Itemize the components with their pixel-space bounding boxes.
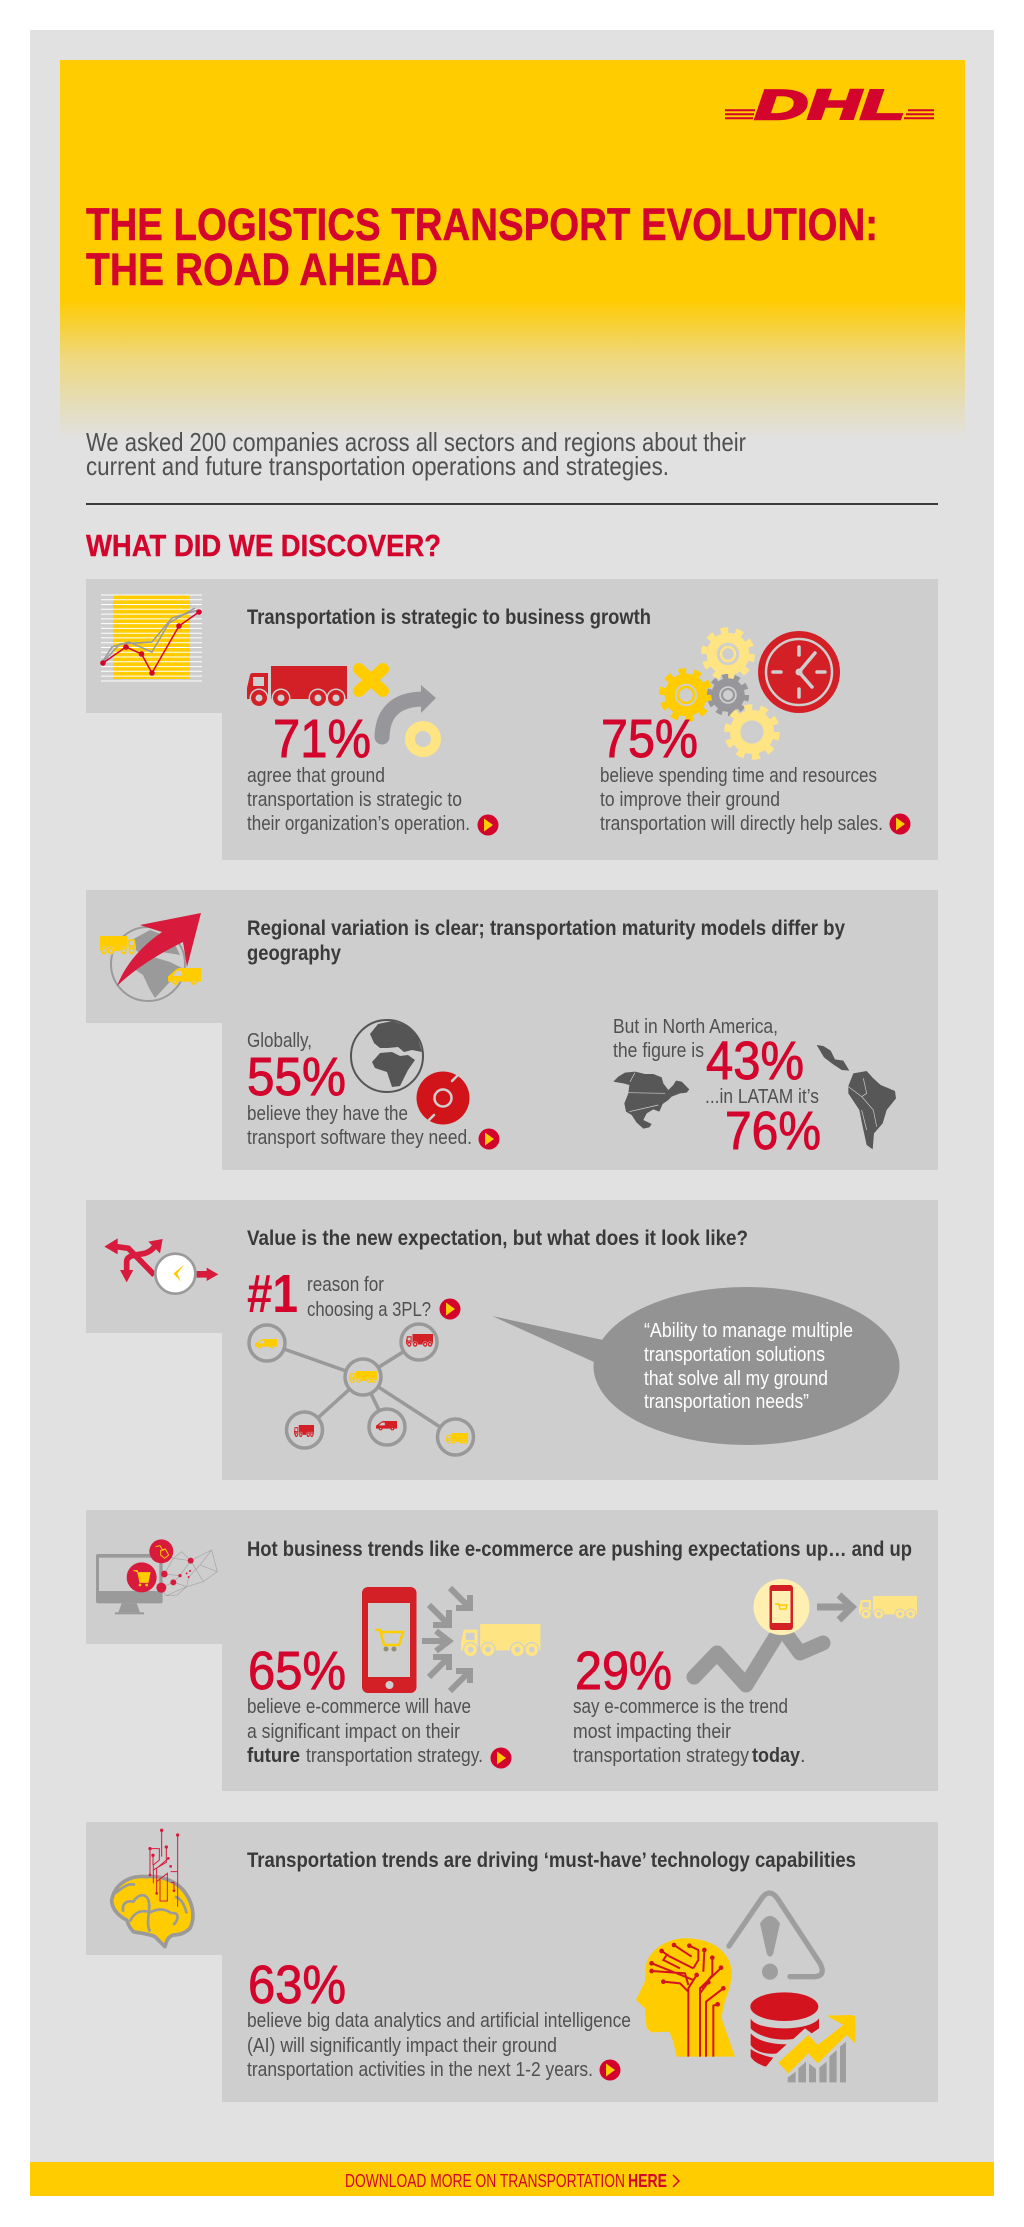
stat 55%: believe they have the	[247, 1103, 408, 1125]
icon: trend line with phone and truck	[694, 1579, 917, 1685]
title: THE LOGISTICS TRANSPORT EVOLUTION:	[86, 199, 878, 250]
stat 29%: most impacting their	[573, 1721, 731, 1743]
stat 55%: Globally,	[247, 1030, 312, 1052]
stat north america 43% and latam 76%: the figure is	[613, 1040, 704, 1062]
panel: technology capabilities	[86, 1822, 938, 2102]
icon: software disc	[416, 1072, 470, 1124]
callout: speech bubble: transportation needs”	[644, 1391, 809, 1413]
stat 71%: 71%	[273, 709, 371, 769]
stat north america 43% and latam 76%: ...in LATAM it’s	[705, 1086, 819, 1108]
stat 63%: (AI) will significantly impact their ground	[247, 2035, 557, 2057]
callout: speech bubble: that solve all my ground	[644, 1368, 828, 1390]
stat 63%: believe big data analytics and artificial intelligence	[247, 2010, 631, 2032]
icon: database	[750, 1992, 819, 2067]
heading: Value is the new expectation, but what does it look like?	[247, 1227, 748, 1250]
stat 29%: transportation strategy	[573, 1745, 749, 1767]
stat north america 43% and latam 76%: 43%	[706, 1031, 804, 1091]
stat 75%: to improve their ground	[600, 789, 780, 811]
stat 71%	[247, 709, 470, 835]
icon: play	[890, 814, 910, 834]
callout: speech bubble	[492, 1287, 900, 1445]
heading	[247, 917, 845, 965]
map: latin america	[817, 1045, 896, 1149]
map: north america	[600, 1062, 700, 1129]
stat 29%: 29%	[575, 1641, 672, 1701]
intro text: We asked 200 companies across all sectors and regions about their	[86, 427, 746, 457]
stat 71%: transportation is strategic to	[247, 789, 462, 811]
icon: gears and clock	[663, 631, 840, 756]
icon: ai head, warning, database, growth	[636, 1893, 855, 2082]
icon: brain with circuit	[112, 1829, 193, 1947]
heading: Regional variation is clear; transportation maturity models differ by	[247, 917, 845, 940]
icon: arrows and clock	[104, 1238, 218, 1294]
stat 63%: 63%	[248, 1955, 346, 2015]
stat 71%: agree that ground	[247, 765, 385, 787]
stat 29%: say e-commerce is the trend	[573, 1696, 788, 1718]
icon: head with circuit	[636, 1938, 735, 2057]
stat #1	[247, 1264, 431, 1324]
stat north america 43% and latam 76%: But in North America,	[613, 1016, 778, 1038]
stat 29%: today	[752, 1745, 801, 1767]
panel: regional variation	[86, 890, 938, 1170]
DHL logo: DHL	[755, 81, 905, 128]
title: THE ROAD AHEAD	[86, 244, 438, 295]
callout: speech bubble: “Ability to manage multiple	[644, 1320, 853, 1342]
icon: play	[490, 1748, 512, 1768]
stat 75%: believe spending time and resources	[600, 765, 877, 787]
stat #1: #1	[247, 1264, 298, 1324]
stat north america 43% and latam 76%	[613, 1016, 821, 1161]
stat 65%: 65%	[248, 1641, 346, 1701]
icon: warning triangle	[729, 1893, 822, 1980]
panel: e-commerce trends	[86, 1510, 938, 1791]
stat 55%	[247, 1030, 472, 1149]
heading: geography	[247, 942, 341, 965]
DHL logo	[725, 81, 934, 128]
footer bar: HERE	[628, 2171, 667, 2191]
footer bar: DOWNLOAD MORE ON TRANSPORTATION	[345, 2171, 625, 2191]
icon: line chart	[100, 595, 202, 681]
stat 75%: 75%	[601, 709, 698, 769]
stat 55%: transport software they need.	[247, 1127, 472, 1149]
stat #1: choosing a 3PL?	[307, 1299, 431, 1321]
stat 29%	[573, 1641, 806, 1767]
stat 63%	[247, 1955, 631, 2081]
stat 65%: transportation strategy.	[306, 1745, 483, 1767]
stat 65%	[247, 1641, 483, 1767]
stat 55%: 55%	[247, 1047, 346, 1107]
icon: play	[478, 1128, 500, 1150]
stat 75%: transportation will directly help sales.	[600, 813, 883, 835]
panel: value expectation	[86, 1200, 938, 1480]
stat north america 43% and latam 76%: 76%	[725, 1101, 821, 1161]
stat 71%: their organization’s operation.	[247, 813, 470, 835]
heading: Transportation trends are driving ‘must-have’ technology capabilities	[247, 1849, 856, 1872]
stat 65%: future	[247, 1745, 300, 1767]
stat #1: reason for	[307, 1274, 384, 1296]
stat 65%: a significant impact on their	[247, 1721, 460, 1743]
icon: play	[600, 2060, 620, 2080]
intro text: current and future transportation operations and strategies.	[86, 451, 669, 481]
icon: computer with network	[96, 1539, 217, 1614]
icon: play	[440, 1298, 460, 1320]
icon: play	[478, 814, 498, 836]
heading: Transportation is strategic to business growth	[247, 606, 651, 629]
footer bar	[30, 2162, 994, 2196]
icon: growth bars and arrow	[778, 2015, 855, 2082]
title	[86, 199, 878, 295]
header banner	[60, 60, 965, 439]
heading: Hot business trends like e-commerce are pushing expectations up… and up	[247, 1538, 912, 1561]
section heading: WHAT DID WE DISCOVER?	[86, 528, 441, 563]
callout: speech bubble: transportation solutions	[644, 1344, 825, 1366]
stat 29%: .	[800, 1745, 806, 1767]
intro text	[86, 427, 746, 481]
panel: strategic to business growth	[86, 579, 938, 860]
icon: arrows into truck	[422, 1588, 540, 1691]
stat 75%	[600, 709, 883, 835]
icon: dark globe	[351, 1020, 423, 1092]
icon: phone with cart	[362, 1587, 416, 1693]
icon: truck with x and arrow	[247, 666, 436, 752]
stat 63%: transportation activities in the next 1-2 years.	[247, 2059, 593, 2081]
icon: globe with arrow and trucks	[100, 913, 201, 1001]
network diagram	[249, 1324, 474, 1455]
stat 65%: believe e-commerce will have	[247, 1696, 471, 1718]
